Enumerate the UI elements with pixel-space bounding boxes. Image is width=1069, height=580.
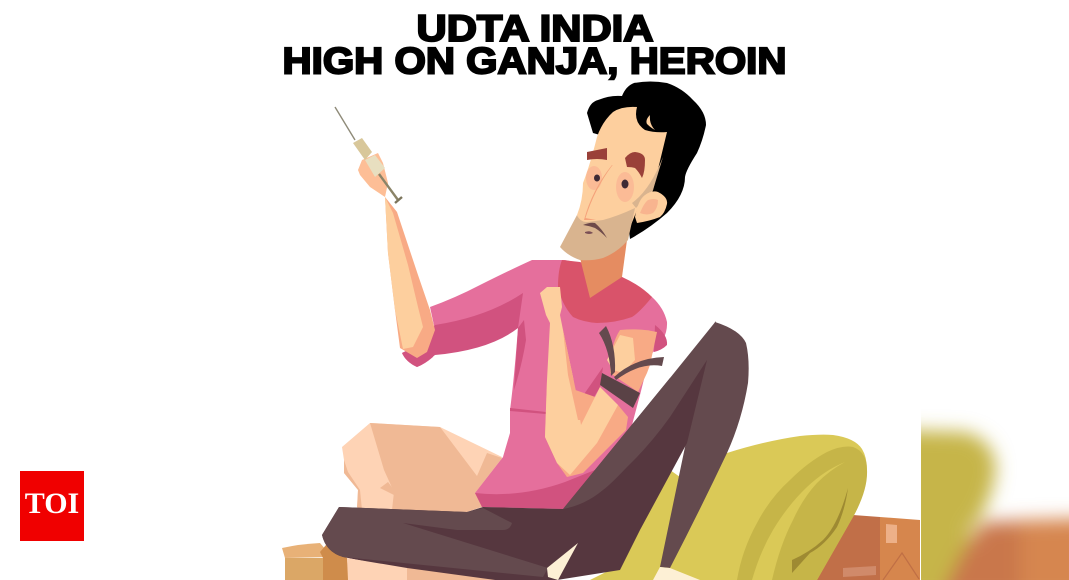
raised arm — [385, 197, 435, 358]
box: right crate — [810, 515, 920, 580]
logo: TOI — [20, 471, 84, 541]
blurred background panel — [900, 430, 1069, 580]
foot — [653, 567, 700, 580]
lower shin — [347, 558, 510, 580]
far leg — [660, 322, 749, 568]
nose line — [584, 165, 613, 220]
beard — [560, 208, 635, 260]
cushion — [590, 435, 867, 580]
near knee and thigh — [342, 423, 502, 512]
tourniquet band — [599, 326, 664, 408]
collar — [558, 260, 652, 323]
head — [560, 82, 706, 260]
eyebrows — [587, 148, 645, 178]
title — [282, 8, 786, 82]
neck — [580, 240, 627, 298]
hair — [587, 82, 706, 239]
illustration: man with syringe on cushion — [282, 82, 920, 580]
upper arm above band — [610, 329, 657, 392]
near leg — [322, 321, 716, 580]
title: HIGH ON GANJA, HEROIN — [282, 40, 786, 82]
box: left crate — [282, 543, 349, 580]
face — [577, 107, 667, 240]
title: UDTA INDIA — [416, 8, 654, 49]
ear — [635, 191, 667, 223]
hand holding syringe — [358, 153, 388, 197]
eyes — [594, 174, 628, 188]
raised fist and forearm — [540, 287, 657, 477]
pink shirt body — [402, 260, 667, 509]
logo: TOI: TOI — [25, 487, 79, 520]
eye bags — [586, 166, 634, 202]
hair curl — [646, 115, 655, 130]
mouth — [583, 223, 607, 238]
syringe — [335, 107, 402, 203]
